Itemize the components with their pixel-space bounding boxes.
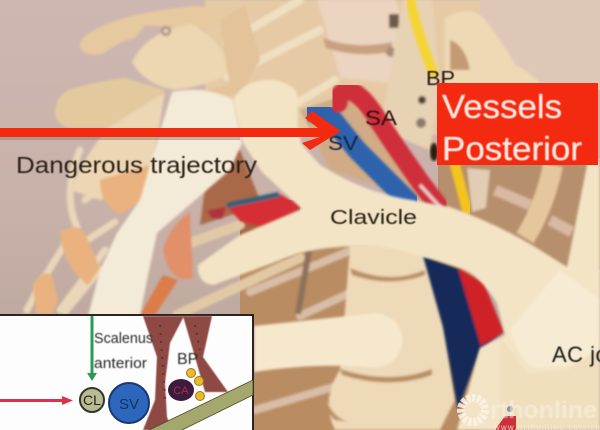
rear vessel behind clavicle (207, 192, 302, 228)
scalene muscles (143, 316, 228, 430)
label: SA: SA (365, 107, 397, 130)
pale tissue next to nerve (467, 168, 490, 212)
humerus head (55, 78, 165, 200)
trajectory arrow (0, 111, 341, 150)
left cream bone (88, 90, 242, 316)
callout: Vessels Posterior: Posterior (442, 130, 582, 167)
right ribs (525, 165, 553, 238)
clavicle (198, 80, 600, 430)
green arrow (87, 316, 97, 381)
inset diagram (0, 315, 253, 430)
label: Clavicle: Clavicle (330, 207, 417, 229)
top right shoulder bone (445, 11, 542, 85)
red arrow (0, 396, 73, 405)
label: SV: SV (328, 133, 359, 155)
CL circle (80, 388, 104, 412)
label: Scalenus anterior: Scalenus (94, 331, 153, 347)
sternum (326, 245, 455, 430)
BP label: BP (426, 68, 455, 90)
label: Scalenus anterior: anterior (94, 356, 147, 372)
first rib (147, 380, 253, 430)
muscle fibre dots (160, 325, 200, 400)
nerve dots (186, 368, 204, 400)
label: BP: BP (177, 351, 198, 368)
watermark: orthonline: rthonline (490, 397, 597, 424)
lower subclavian vessels (423, 256, 504, 410)
lower bright rib (254, 313, 403, 372)
orange cartilage (33, 165, 193, 315)
strut (298, 250, 309, 314)
scapula (80, 5, 260, 95)
thin left ribs (27, 150, 115, 312)
callout: Vessels Posterior: Vessels (442, 88, 562, 125)
CA circle: CA (173, 385, 189, 397)
SV circle: SV (119, 396, 139, 413)
CL circle: CL (83, 392, 101, 408)
label: Dangerous trajectory: Dangerous trajectory (16, 152, 258, 178)
SV circle (109, 383, 149, 423)
label: Scalenus anterior (94, 331, 153, 372)
subclavian vein (blue) (312, 112, 412, 205)
callout: Vessels Posterior (437, 83, 598, 167)
tan gap behind vessels (300, 95, 440, 205)
braided wire (260, 0, 268, 120)
CA circle (168, 379, 194, 401)
watermark: orthonline (461, 397, 600, 430)
pale stripes behind sternum (250, 250, 352, 410)
cervical spine (317, 0, 440, 150)
lower nerve (yellow) (410, 0, 467, 210)
small dark detail near posterior box (430, 143, 438, 161)
subclavian artery (red) (338, 91, 441, 208)
upper ribs (227, 0, 335, 103)
